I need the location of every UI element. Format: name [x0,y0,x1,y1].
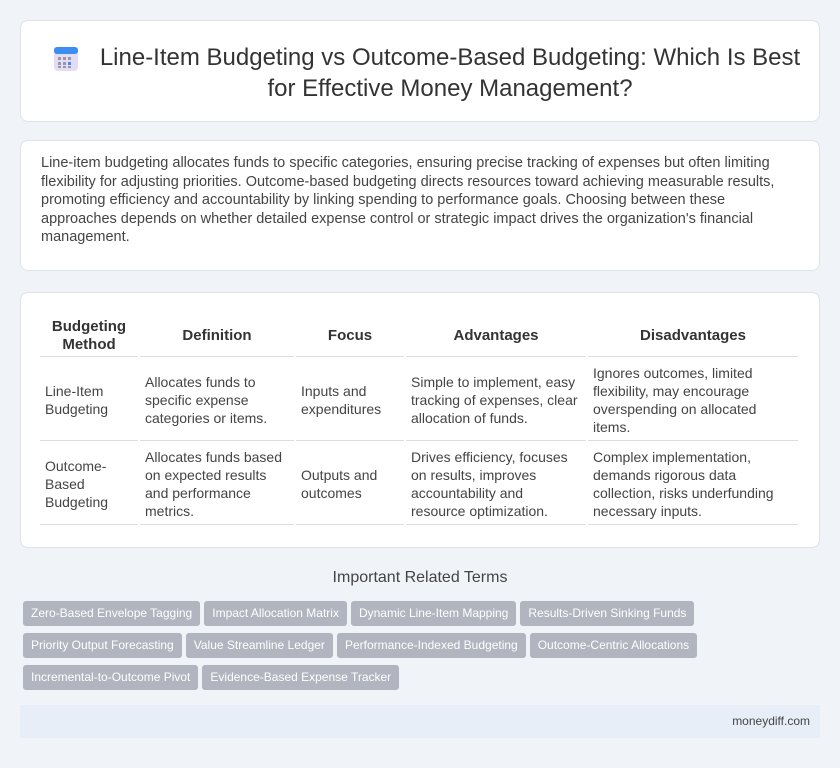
table: Allocates funds based on expected results and performance metrics. [145,448,282,518]
table: Ignores outcomes, limited flexibility, may encourage overspending on allocated items. [593,364,756,434]
footer: moneydiff.com [732,714,810,728]
related terms tags: Value Streamline Ledger [194,638,325,652]
related terms tags [23,601,697,690]
comparison table card [20,292,820,548]
related terms tags: Priority Output Forecasting [31,638,174,652]
table: Outputs and outcomes [301,466,377,500]
table: Allocates funds to specific expense categories or items. [145,374,267,426]
table: Inputs and expenditures [301,382,381,416]
related terms tags: Evidence-Based Expense Tracker [210,670,391,684]
header card [20,20,820,122]
icon: calendar [54,47,78,71]
related terms tags: Performance-Indexed Budgeting [345,638,518,652]
table: Budgeting Method [52,318,126,352]
related terms tags: Zero-Based Envelope Tagging [31,606,192,620]
table: Outcome-Based Budgeting [45,458,108,510]
footer [20,705,820,738]
related terms tags: Results-Driven Sinking Funds [528,606,686,620]
related terms tags: Dynamic Line-Item Mapping [359,606,508,620]
table: Focus [328,326,372,344]
table: Simple to implement, easy tracking of expenses, clear allocation of funds. [411,374,578,426]
table: Advantages [453,326,539,344]
table: Definition [182,326,252,344]
related terms tags: Impact Allocation Matrix [212,606,339,620]
table: Drives efficiency, focuses on results, improves accountability and resource optimization. [411,448,568,518]
table [40,318,798,525]
intro text [20,140,820,271]
title: Line-Item Budgeting vs Outcome-Based Budgeting: Which Is Best for Effective Money Management? [100,44,800,102]
related terms tags: Incremental-to-Outcome Pivot [31,670,190,684]
table: Complex implementation, demands rigorous data collection, risks underfunding necessary inputs. [593,448,774,518]
table: Disadvantages [640,326,746,344]
intro text: Line-item budgeting allocates funds to specific categories, ensuring precise tracking of expenses but often limiting flexibility for adjusting priorities. Outcome-based budgeting directs resources toward achieving measurable results, promoting efficiency and accountability by linking spending to performance goals. Choosing between these approaches depends on whether detailed expense control or strategic impact drives the organization's financial management. [41,155,774,245]
related terms tags: Outcome-Centric Allocations [538,638,689,652]
related terms heading: Important Related Terms [333,569,507,586]
table: Line-Item Budgeting [45,382,108,416]
